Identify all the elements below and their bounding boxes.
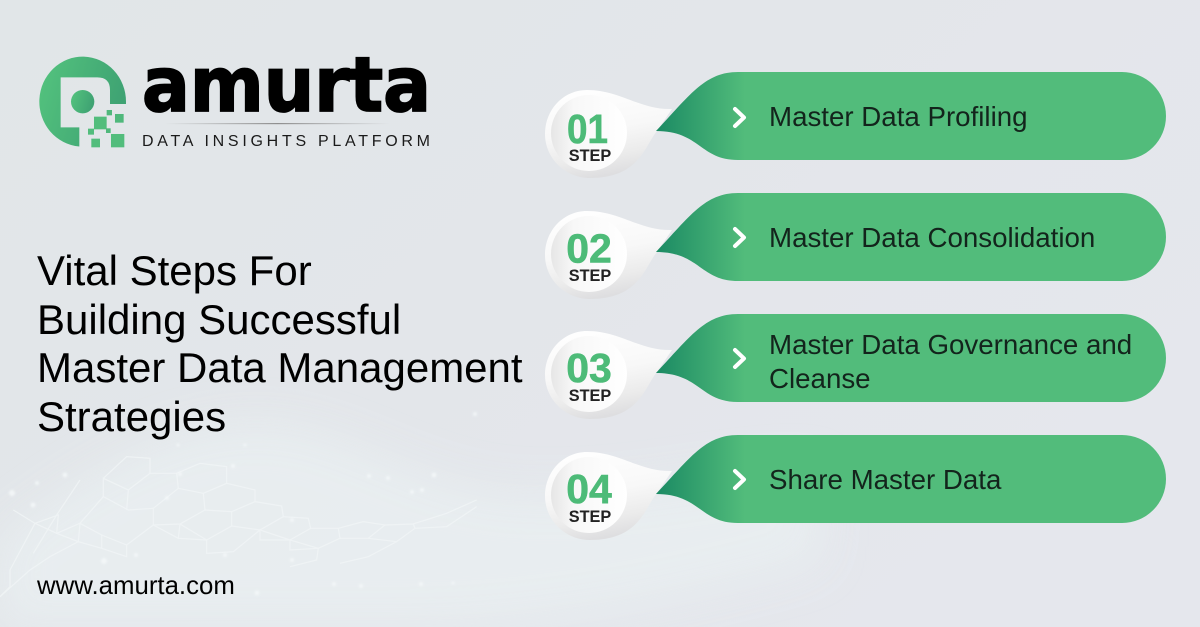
chevron bbox=[735, 350, 744, 367]
hexagon mesh bbox=[0, 457, 477, 597]
chevron bbox=[735, 471, 744, 488]
step number: 01 bbox=[567, 106, 608, 152]
step number: 02 bbox=[566, 226, 612, 272]
step 4 bbox=[545, 435, 1166, 540]
title: Vital Steps For bbox=[37, 247, 312, 294]
step 3 bbox=[545, 314, 1166, 419]
title: Building Successful bbox=[37, 296, 401, 343]
chevron bbox=[735, 109, 744, 126]
pointer bubble bbox=[545, 211, 672, 299]
title: Master Data Management bbox=[37, 344, 523, 391]
step 2 bbox=[545, 193, 1166, 299]
step label: STEP bbox=[569, 267, 611, 285]
chevron bbox=[735, 229, 744, 246]
pointer bubble bbox=[545, 452, 672, 540]
step text: Share Master Data bbox=[769, 464, 1002, 495]
step text: Master Data Governance and bbox=[769, 329, 1132, 360]
green band bbox=[656, 72, 1166, 160]
website url: www.amurta.com bbox=[36, 572, 235, 600]
pointer bubble bbox=[545, 90, 672, 178]
step text: Master Data Profiling bbox=[769, 101, 1028, 132]
step label: STEP bbox=[569, 147, 611, 165]
step 1 bbox=[545, 72, 1166, 178]
logo tagline: DATA INSIGHTS PLATFORM bbox=[142, 133, 430, 150]
title: Strategies bbox=[37, 393, 226, 440]
particles bbox=[9, 412, 477, 596]
icon: amurta mark bbox=[39, 57, 126, 147]
step text: Cleanse bbox=[769, 363, 871, 394]
step text: Master Data Consolidation bbox=[769, 222, 1095, 253]
green band bbox=[656, 193, 1166, 281]
green band bbox=[656, 314, 1166, 402]
title bbox=[37, 247, 523, 440]
green band bbox=[656, 435, 1166, 523]
step label: STEP bbox=[569, 387, 611, 405]
pointer bubble bbox=[545, 331, 672, 419]
step label: STEP bbox=[569, 508, 611, 526]
logo wordmark: amurta bbox=[142, 40, 431, 129]
step number: 03 bbox=[566, 345, 612, 391]
step number: 04 bbox=[566, 466, 612, 512]
logo: amurta bbox=[39, 40, 431, 150]
